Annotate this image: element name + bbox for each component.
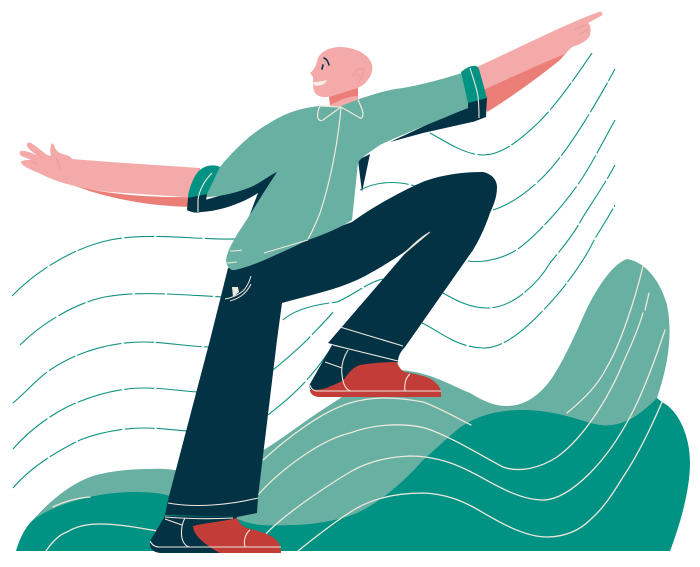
right shoe lines — [310, 327, 441, 391]
head — [310, 47, 372, 97]
trousers — [165, 172, 497, 517]
left shoe, red — [193, 518, 281, 553]
right shoe, navy — [309, 345, 398, 394]
cream wave contour lines — [46, 266, 665, 551]
mouth — [313, 80, 327, 86]
right cuff — [461, 66, 487, 122]
left arm — [20, 143, 200, 207]
dark wave — [16, 398, 690, 551]
right shoe, red — [310, 362, 441, 397]
shirt — [205, 73, 470, 270]
arm and hand — [477, 12, 602, 90]
light wave — [16, 259, 670, 551]
thigh crease — [403, 232, 430, 255]
shirt shadows — [200, 168, 281, 222]
collar and placket — [308, 100, 363, 239]
hem lines — [227, 240, 308, 263]
neck — [329, 85, 358, 107]
pocket — [225, 276, 251, 301]
left cuff — [187, 165, 220, 213]
right arm — [477, 12, 602, 112]
thin wind lines, right group — [268, 53, 615, 415]
left shoe and hem lines — [150, 498, 281, 547]
arm shadow — [483, 52, 567, 112]
eye — [322, 65, 323, 69]
ear — [353, 69, 364, 85]
arm shadow — [70, 184, 198, 207]
thin wind lines, left group — [12, 236, 236, 488]
eyebrow — [324, 58, 329, 65]
arm and hand — [20, 143, 200, 198]
left shoe, sock side — [150, 516, 237, 553]
